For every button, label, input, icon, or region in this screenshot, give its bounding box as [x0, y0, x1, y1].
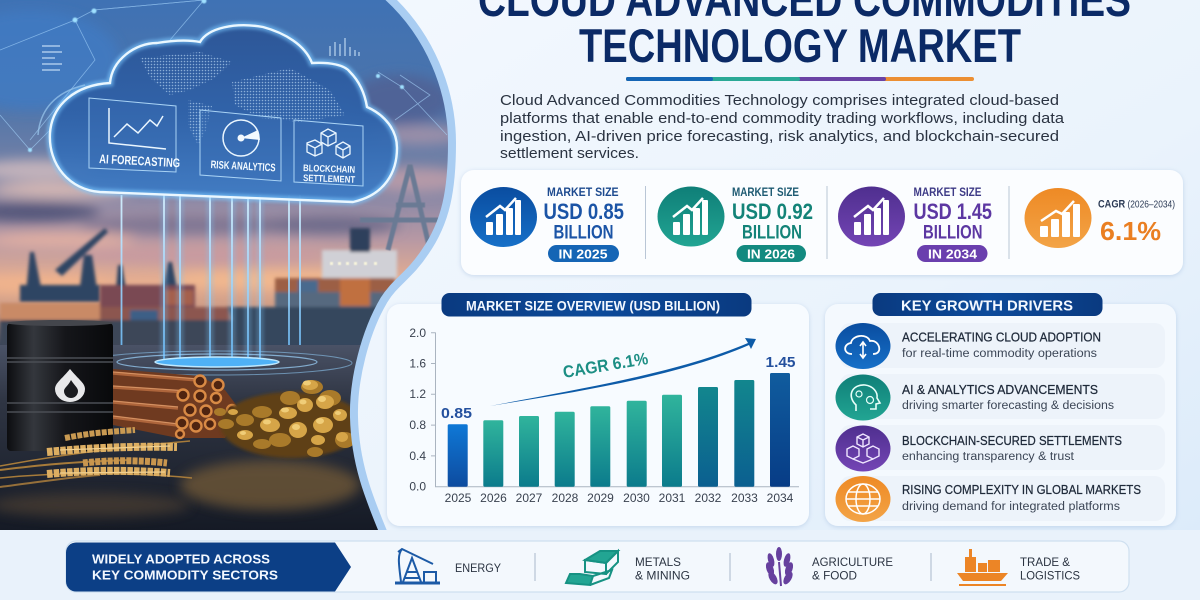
icon: growth chart orange	[1024, 188, 1092, 248]
y axis labels: 0.4	[409, 449, 426, 463]
banner: widely adopted: KEY COMMODITY SECTORS	[92, 568, 278, 582]
x axis labels	[445, 491, 794, 505]
stat: 2034: BILLION	[923, 222, 982, 244]
sector: metals: METALS	[635, 557, 681, 569]
x axis labels: 2029	[587, 491, 614, 505]
x axis labels: 2026	[480, 491, 507, 505]
driver: global markets: driving demand for integrated platforms	[902, 501, 1120, 513]
stat: 2026: MARKET SIZE	[732, 185, 799, 199]
panel: blockchain settlement: BLOCKCHAIN	[303, 163, 355, 176]
stat: 2025: USD 0.85	[544, 199, 624, 224]
drop logo	[55, 369, 85, 402]
stat: CAGR	[1024, 188, 1175, 248]
stat: 2025: BILLION	[554, 222, 614, 244]
copper pipes	[113, 369, 240, 438]
heading: market size overview	[442, 293, 752, 316]
sector: metals: & MINING	[635, 570, 690, 582]
title: TECHNOLOGY MARKET	[579, 19, 1021, 72]
stat: CAGR: CAGR (2026–2034)	[1098, 198, 1175, 210]
stat: 2026: IN 2026	[747, 246, 795, 262]
stat: 2034: MARKET SIZE	[914, 185, 982, 199]
stat: 2034	[838, 185, 992, 262]
value labels: 0.85	[441, 405, 472, 422]
icon: growth chart purple	[838, 186, 905, 246]
icon: ingots	[566, 551, 618, 585]
x axis labels: 2033	[731, 491, 758, 505]
bottom background strip	[0, 530, 1200, 600]
icon: growth chart blue	[470, 187, 537, 247]
sector: trade	[957, 549, 1080, 586]
icon: cloud	[836, 323, 890, 369]
world map hint	[140, 52, 345, 145]
x axis labels: 2025	[445, 491, 472, 505]
icon: AI head	[836, 374, 890, 420]
panel: AI forecasting: AI FORECASTING	[99, 152, 180, 170]
banner: widely adopted: WIDELY ADOPTED ACROSS	[92, 552, 270, 566]
y axis labels: 0.8	[409, 418, 426, 432]
description: Cloud Advanced Commodities Technology comprises integrated cloud-based	[500, 92, 1059, 109]
driver: AI analytics: driving smarter forecasting & decisions	[902, 400, 1114, 412]
stat: 2025	[470, 185, 624, 262]
sector: agriculture	[764, 547, 893, 586]
port: right crane	[360, 165, 448, 250]
driver: cloud adoption: for real-time commodity operations	[902, 348, 1097, 360]
sector: agriculture: AGRICULTURE	[812, 557, 893, 569]
sector: trade: LOGISTICS	[1020, 570, 1080, 582]
x axis labels: 2031	[659, 491, 686, 505]
light platform	[82, 351, 352, 375]
icon: blockchain cubes	[836, 426, 890, 472]
curved content backdrop	[354, 0, 1200, 534]
wheat sheaf	[0, 430, 192, 487]
panel: risk analytics: RISK ANALYTICS	[210, 159, 276, 174]
port: containers left	[0, 285, 240, 347]
growth arrow	[490, 338, 756, 406]
y axis labels: 1.6	[409, 356, 426, 370]
y axis labels: 2.0	[409, 326, 426, 340]
panel: blockchain settlement	[294, 120, 363, 186]
driver: cloud adoption	[836, 323, 1165, 369]
sector: energy	[395, 549, 501, 583]
y axis labels	[409, 326, 426, 494]
background hologram bars	[42, 38, 359, 70]
driver: global markets: RISING COMPLEXITY IN GLOBAL MARKETS	[902, 483, 1141, 497]
x axis labels: 2034	[767, 491, 794, 505]
AI cloud	[38, 25, 397, 202]
driver: global markets	[836, 476, 1165, 522]
oil barrel	[7, 320, 113, 451]
description: ingestion, AI-driven price forecasting, risk analytics, and blockchain-secured	[500, 128, 1059, 145]
sector: energy: ENERGY	[455, 563, 501, 575]
icon: growth chart teal	[658, 186, 724, 246]
title underline	[626, 77, 974, 81]
sunset clouds	[0, 10, 465, 293]
driver: AI analytics: AI & ANALYTICS ADVANCEMENTS	[902, 383, 1098, 397]
light beams	[164, 195, 260, 360]
y axis labels: 0.0	[409, 480, 426, 494]
network lines	[0, 0, 447, 150]
stat: 2034: USD 1.45	[914, 199, 992, 224]
port: container ship	[228, 228, 398, 347]
stat: CAGR: 6.1%	[1100, 216, 1161, 246]
x axis labels: 2030	[623, 491, 650, 505]
driver: blockchain: BLOCKCHAIN-SECURED SETTLEMENTS	[902, 434, 1122, 448]
driver: blockchain	[836, 425, 1165, 472]
x axis labels: 2032	[695, 491, 722, 505]
x axis labels: 2027	[516, 491, 543, 505]
panel: AI forecasting	[89, 98, 180, 172]
banner: widely adopted	[66, 542, 351, 592]
hero photo: cloud over commodities port	[0, 0, 470, 530]
sector: agriculture: & FOOD	[812, 570, 857, 582]
stat: 2025: IN 2025	[558, 246, 608, 262]
y axis labels: 1.2	[409, 387, 426, 401]
description: settlement services.	[500, 145, 639, 162]
panel: blockchain settlement: SETTLEMENT	[303, 173, 355, 186]
x axis labels: 2028	[552, 491, 579, 505]
gold nuggets	[214, 380, 364, 458]
value labels	[441, 354, 796, 422]
stat: 2026: USD 0.92	[732, 199, 813, 224]
heading: key growth drivers: KEY GROWTH DRIVERS	[901, 298, 1073, 314]
driver: AI analytics	[836, 374, 1165, 420]
panel: market statistics	[461, 170, 1183, 275]
description	[500, 92, 1065, 162]
icon: oil pump	[395, 549, 440, 583]
icon: wheat	[764, 547, 795, 586]
panel: commodity sectors strip	[66, 541, 1129, 592]
sector: trade: TRADE &	[1020, 557, 1070, 569]
driver: cloud adoption: ACCELERATING CLOUD ADOPTION	[902, 330, 1101, 344]
stat: 2026: BILLION	[742, 222, 802, 244]
heading: market size overview: MARKET SIZE OVERVIEW (USD BILLION)	[466, 298, 720, 314]
stat: 2034: IN 2034	[928, 246, 978, 262]
heading: key growth drivers	[872, 293, 1102, 316]
floor	[0, 345, 378, 530]
panel: market size chart	[387, 293, 809, 526]
icon: cargo ship	[957, 549, 1008, 586]
description: platforms that enable end-to-end commodity trading workflows, including data	[500, 110, 1065, 127]
port: left cranes	[20, 228, 180, 302]
panel: key growth drivers	[825, 293, 1176, 526]
driver: blockchain: enhancing transparency & trust	[902, 451, 1075, 463]
CAGR label: CAGR 6.1%	[562, 349, 649, 382]
value labels: 1.45	[766, 354, 796, 371]
panel: risk analytics	[200, 110, 281, 181]
axes	[431, 332, 799, 487]
title	[478, 0, 1131, 72]
stat: 2026	[658, 185, 813, 262]
icon: globe	[836, 476, 890, 522]
bars	[448, 373, 790, 487]
stat: 2025: MARKET SIZE	[547, 185, 619, 199]
sector: metals	[566, 551, 690, 585]
